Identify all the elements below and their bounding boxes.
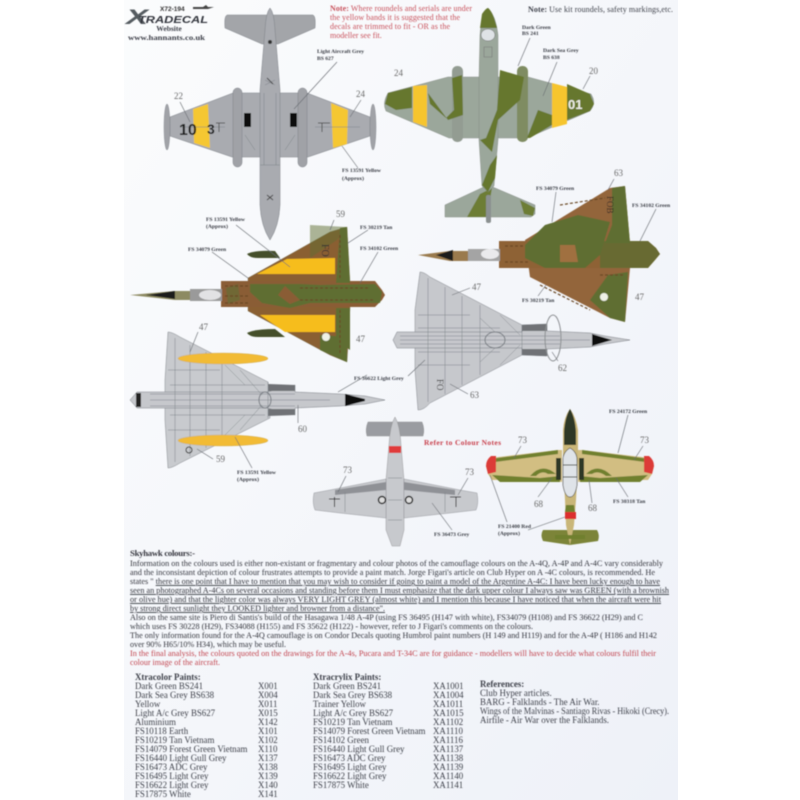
- callouts: Canberra grey: BS 627: [317, 56, 334, 62]
- wing: [525, 186, 630, 322]
- callouts: Canberra grey: FS 13591 Yellow: [342, 168, 382, 174]
- note: use kit roundels: Note: Use kit roundels, safety markings,etc.: [528, 5, 673, 14]
- aircraft: Mirage upper camouflaged with yellow bands: [130, 225, 385, 362]
- callouts: Mirage underside left: 47: [199, 322, 208, 332]
- yellow bands: [552, 83, 567, 128]
- mottling: [225, 235, 375, 355]
- table: Xtracolor paints: [135, 672, 278, 799]
- callouts: Mirage upper right: 47: [635, 292, 644, 302]
- callouts: Mirage underside left: 60: [298, 424, 308, 434]
- table: Xtracolor paints: X137: [258, 753, 278, 763]
- nose and canopy: [130, 291, 220, 300]
- note: roundels and serials: decals are trimmed to fit - OR as the: [330, 22, 450, 31]
- table: Xtracrylix paints: Light A/c Grey BS627: [313, 708, 394, 718]
- table: Xtracolor paints: FS10219 Tan Vietnam: [135, 735, 214, 745]
- callouts: Pucara grey: 73: [343, 465, 352, 475]
- table: Xtracolor paints: FS17875 White: [135, 789, 191, 799]
- table: Xtracrylix paints: XA1116: [433, 735, 463, 745]
- references: Wings of the Malvinas - Santiago Rivas - Hikoki (Crecy).: [480, 706, 669, 716]
- callouts: Mirage underside right: 63: [470, 390, 480, 400]
- wing: [415, 272, 522, 410]
- table: Xtracolor paints: FS16473 ADC Grey: [135, 762, 208, 772]
- wings: [313, 479, 386, 518]
- references: [480, 679, 669, 725]
- table: Xtracolor paints: FS16622 Light Grey: [135, 780, 209, 790]
- wing: [248, 227, 350, 362]
- table: Xtracrylix paints: XA1137: [433, 744, 464, 754]
- table: Xtracrylix paints: FS17875 White: [313, 780, 369, 790]
- callouts: Canberra camouflaged: 20: [589, 66, 598, 76]
- table: Xtracrylix paints: XA1110: [433, 726, 463, 736]
- text block: Skyhawk colours: In the final analysis, the colours quoted on the drawings for the A-4s, Pucara and T-34C are for guidance - modellers will have to decide what colours fulfil their: [130, 648, 656, 658]
- references: Airfile - Air War over the Falklands.: [480, 715, 609, 725]
- table: Xtracrylix paints: XA1140: [433, 771, 464, 781]
- fuselage: [499, 241, 660, 268]
- text block: Skyhawk colours: by strong direct sunlight they LOOKED lighter and browner from a distance".: [130, 603, 385, 613]
- table: Xtracrylix paints: XA1011: [433, 699, 463, 709]
- table: Xtracolor paints: X102: [258, 735, 278, 745]
- aircraft: Canberra underside grey: [164, 8, 376, 240]
- intake shading: [268, 384, 295, 416]
- text block: Skyhawk colours: seen an photographed A-4Cs on several occasions and standing before them I must emphasize that the dark upper colour I always saw was GREEN (with a brownish: [130, 585, 670, 595]
- table: Xtracrylix paints: [313, 672, 464, 790]
- table: Xtracolor paints: X142: [258, 717, 278, 727]
- intake shading: [522, 324, 547, 356]
- mottling: [505, 198, 625, 310]
- callouts: Mirage underside right: [338, 282, 567, 400]
- wings: [384, 77, 594, 138]
- white serial: 01: [568, 97, 582, 112]
- table: Xtracolor paints: Dark Green BS241: [135, 681, 203, 691]
- logo: Xtradecal: www.hannants.co.uk: [128, 33, 206, 42]
- table: Xtracrylix paints: Trainer Yellow: [313, 699, 367, 709]
- panel lines: [150, 338, 330, 462]
- callouts: Pucara camouflaged: FS 21400 Red: [498, 524, 532, 530]
- table: Xtracrylix paints: XA1102: [433, 717, 463, 727]
- canopy: [481, 29, 495, 41]
- text block: Skyhawk colours: [130, 548, 670, 667]
- fuselage: [386, 417, 404, 546]
- callouts: Canberra camouflaged: BS 241: [522, 31, 539, 37]
- text block: Skyhawk colours: states " there is one point that I have to mention that you may wish to consider if going to paint a model of the Argentine A-4C: I have been lucky enough to have: [130, 576, 660, 586]
- nose and canopy: [418, 251, 498, 261]
- wing camouflage patches: [385, 8, 594, 192]
- table: Xtracrylix paints: FS16622 Light Grey: [313, 771, 387, 781]
- callouts: Canberra grey: [174, 49, 382, 182]
- table: Xtracolor paints: X141: [258, 789, 278, 799]
- aircraft: Pucara camouflaged: [486, 409, 654, 545]
- wing root dark panels: [556, 458, 561, 480]
- callouts: Mirage underside left: FS 13591 Yellow: [237, 470, 277, 476]
- callouts: Mirage upper left: (Approx): [206, 223, 228, 230]
- fuselage: [393, 324, 630, 356]
- table: Xtracolor paints: FS16440 Light Gull Grey: [135, 753, 227, 763]
- table: Xtracolor paints: FS16495 Light Grey: [135, 771, 209, 781]
- fuel tanks: [247, 251, 280, 258]
- callouts: Mirage upper right: [522, 168, 671, 304]
- table: Xtracolor paints: Light A/c Grey BS627: [135, 708, 216, 718]
- table: Xtracolor paints: X004: [258, 690, 278, 700]
- note: roundels and serials: modeller see fit.: [330, 31, 382, 40]
- text block: Skyhawk colours: over 90% H65/10% H34), which may be useful.: [130, 639, 286, 649]
- table: Xtracrylix paints: FS14079 Forest Green Vietnam: [313, 726, 426, 736]
- table: Xtracrylix paints: FS14102 Green: [313, 735, 370, 745]
- aircraft: Pucara underside grey: [313, 417, 478, 546]
- callouts: Mirage underside right: FS 36622 Light Grey: [354, 376, 404, 382]
- red band: [389, 446, 401, 453]
- callouts: Mirage upper left: 47: [356, 334, 366, 344]
- roundels: [378, 496, 386, 504]
- refer to colour notes: Refer to Colour Notes: [424, 438, 501, 447]
- wing: [165, 332, 270, 468]
- table: Xtracolor paints: X139: [258, 771, 278, 781]
- aircraft: Canberra underside grey: 3: [207, 121, 215, 137]
- roundel: [322, 333, 330, 341]
- callouts: Canberra camouflaged: Dark Green: [522, 25, 552, 31]
- references: Club Hyper articles.: [480, 688, 552, 698]
- text block: Skyhawk colours: The only information found for the A-4Q camouflage is on Condor Decals quoting Humbrol paint numbers (H 149 and H119) and for the A-4P ( H186 and H142: [130, 630, 657, 640]
- callouts: Canberra camouflaged: [394, 25, 598, 96]
- note: roundels and serials: [330, 4, 472, 40]
- callouts: Pucara camouflaged: FS 30318 Tan: [613, 499, 646, 505]
- fuselage: [260, 8, 280, 240]
- table: Xtracolor paints: Xtracolor Paints:: [135, 672, 201, 682]
- logo: Xtradecal: X: [124, 6, 151, 29]
- fuselage: [221, 281, 385, 307]
- table: Xtracolor paints: X138: [258, 762, 278, 772]
- callouts: Mirage upper right: 63: [614, 168, 624, 178]
- table: Xtracrylix paints: FS16495 Light Grey: [313, 762, 387, 772]
- logo: Xtradecal: X72-194: [160, 6, 185, 13]
- table: Xtracolor paints: X011: [258, 699, 277, 709]
- table: Xtracrylix paints: FS10219 Tan Vietnam: [313, 717, 392, 727]
- logo: Xtradecal: TRADECAL: [138, 14, 208, 26]
- callouts: Pucara grey: [338, 465, 474, 538]
- yellow tanks: [178, 353, 268, 364]
- references: BARG - Falklands - The Air War.: [480, 697, 600, 707]
- aircraft: Canberra camouflaged upper: [384, 8, 594, 223]
- canopy: [563, 448, 577, 497]
- table: Xtracolor paints: FS14079 Forest Green Vietnam: [135, 744, 248, 754]
- table: Xtracrylix paints: Xtracrylix Paints:: [313, 672, 381, 682]
- callouts: Mirage underside left: 59: [216, 454, 226, 464]
- callouts: Mirage upper left: [188, 209, 399, 344]
- tailplane: [225, 15, 315, 44]
- aircraft: Mirage upper camouflaged right: [418, 186, 660, 322]
- callouts: Mirage upper left: 59: [336, 209, 346, 219]
- table: Xtracrylix paints: XA1138: [433, 753, 464, 763]
- yellow bands: [257, 258, 335, 274]
- heading: Skyhawk colours:-: [130, 548, 195, 558]
- aircraft: Mirage underside right: [393, 272, 630, 410]
- table: Xtracolor paints: FS10118 Earth: [135, 726, 189, 736]
- callouts: Mirage upper left: FS 13591 Yellow: [206, 217, 246, 223]
- fuselage: [479, 8, 498, 192]
- table: Xtracrylix paints: FS16473 ADC Grey: [313, 753, 386, 763]
- aircraft: Mirage underside with yellow tanks: [130, 332, 385, 468]
- callouts: Mirage underside left: (Approx): [237, 476, 259, 483]
- callouts: Canberra grey: 24: [356, 89, 366, 99]
- table: Xtracrylix paints: XA1015: [433, 708, 464, 718]
- table: Xtracrylix paints: XA1139: [433, 762, 464, 772]
- yellow wing bands: [193, 104, 210, 148]
- callouts: Canberra camouflaged: BS 638: [543, 55, 560, 61]
- fuselage: [563, 409, 578, 545]
- callouts: Mirage upper right: FS 34102 Green: [632, 203, 671, 209]
- callouts: Pucara camouflaged: [490, 409, 650, 537]
- callouts: Pucara grey: 73: [465, 467, 474, 477]
- tailplane: [445, 185, 535, 217]
- left wing: [170, 93, 262, 157]
- logo: Xtradecal: Website: [156, 24, 182, 33]
- tailplane: [542, 530, 599, 545]
- callouts: Pucara camouflaged: (Approx): [498, 530, 520, 537]
- wing tip tanks: [164, 104, 170, 150]
- callouts: Pucara camouflaged: 68: [534, 499, 544, 509]
- table: Xtracolor paints: X140: [258, 780, 278, 790]
- note: roundels and serials: Note: Where roundels and serials are under: [330, 4, 472, 13]
- text block: Skyhawk colours: which uses FS 30228 (H29), FS34088 (H155) and FS 35622 (H122) - however, refer to J Figari's comments on the colours.: [130, 621, 533, 631]
- text block: Skyhawk colours: or olive hue) and that the lighter color was always VERY LIGHT GREY (almost white) and I mention this because I have noticed that when the aircraft were hit: [130, 594, 662, 604]
- table: Xtracrylix paints: XA1004: [433, 690, 464, 700]
- wing pylon oval: [545, 315, 561, 361]
- callouts: Canberra camouflaged: 24: [394, 68, 404, 78]
- text block: Skyhawk colours: and the inconsistant depiction of colour frustrates attempts to provide a paint match. Jorge Figari's article on Club Hyper on A -4C colours, is recommended. He: [130, 567, 655, 577]
- callouts: Pucara camouflaged: 73: [640, 435, 650, 445]
- callouts: Canberra camouflaged: Dark Sea Grey: [543, 48, 579, 54]
- text block: Skyhawk colours: colour image of the aircraft.: [130, 657, 220, 667]
- black wing panels: [244, 113, 251, 127]
- roundel: [600, 293, 608, 301]
- fuselage: [130, 385, 385, 415]
- callouts: Pucara camouflaged: 68: [588, 503, 598, 513]
- right wing: [278, 93, 370, 157]
- table: Xtracolor paints: X015: [258, 708, 278, 718]
- callouts: Pucara camouflaged: FS 24172 Green: [609, 409, 648, 415]
- references: References:: [480, 679, 524, 689]
- table: Xtracolor paints: Aluminium: [135, 717, 176, 727]
- callouts: Mirage upper left: FS 30219 Tan: [360, 225, 393, 231]
- callouts: Mirage underside right: 47: [472, 282, 482, 292]
- logo: Xtradecal: [124, 5, 214, 42]
- aircraft: Mirage upper camouflaged with yellow bands: FO: [319, 244, 330, 257]
- green wing patches: [490, 450, 650, 539]
- engine nacelles: [233, 88, 242, 167]
- red fuselage band: [565, 512, 576, 519]
- table: Xtracrylix paints: FS16440 Light Gull Grey: [313, 744, 405, 754]
- callouts: Mirage upper right: FS 34079 Green: [536, 186, 575, 192]
- aircraft: Mirage upper camouflaged right: FOB: [605, 196, 615, 214]
- table: Xtracrylix paints: XA1141: [433, 780, 463, 790]
- serial marks: 10: [179, 122, 197, 139]
- nacelles: [452, 66, 463, 142]
- table: Xtracrylix paints: XA1001: [433, 681, 464, 691]
- table: Xtracrylix paints: Dark Sea Grey BS638: [313, 690, 393, 700]
- callouts: Mirage upper left: FS 34079 Green: [188, 247, 227, 253]
- callouts: Pucara grey: FS 36473 Grey: [434, 532, 470, 538]
- table: Xtracrylix paints: Dark Green BS241: [313, 681, 381, 691]
- tailplane: [366, 422, 424, 436]
- callouts: Mirage underside left: [190, 322, 308, 483]
- panel lines: [400, 278, 590, 402]
- callouts: Pucara camouflaged: 73: [518, 435, 528, 445]
- note: roundels and serials: the yellow bands it is suggested that the: [330, 13, 460, 22]
- table: Xtracolor paints: X001: [258, 681, 278, 691]
- callouts: Canberra grey: 22: [174, 91, 183, 101]
- text block: Skyhawk colours: Information on the colours used is either non-existant or fragmentary and colour photos of the camouflage colours on the A-4Q, A-4P and A-4C vary considerably: [130, 558, 664, 568]
- table: Xtracolor paints: X110: [258, 744, 278, 754]
- green patches: [525, 186, 660, 322]
- callouts: Mirage underside right: 62: [558, 363, 567, 373]
- callouts: Canberra grey: Light Aircraft Grey: [317, 49, 364, 55]
- text block: Skyhawk colours: Also on the same site is Piero di Santis's build of the Hasagawa 1/48 A-4P (using FS 36495 (H147 with white), FS34079 (H108) and FS 36622 (H29) and C: [130, 612, 643, 622]
- wings: [486, 450, 562, 482]
- table: Xtracolor paints: Dark Sea Grey BS638: [135, 690, 215, 700]
- callouts: Mirage upper right: FS 30219 Tan: [522, 298, 555, 304]
- table: Xtracolor paints: X101: [258, 726, 278, 736]
- green patches: [226, 225, 382, 362]
- table: Xtracolor paints: Yellow: [135, 699, 161, 709]
- callouts: Canberra grey: (Approx): [342, 175, 364, 182]
- aircraft: Mirage underside right: FO: [435, 379, 445, 391]
- callouts: Mirage upper left: FS 34102 Green: [360, 246, 399, 252]
- red wing tips: [486, 456, 496, 474]
